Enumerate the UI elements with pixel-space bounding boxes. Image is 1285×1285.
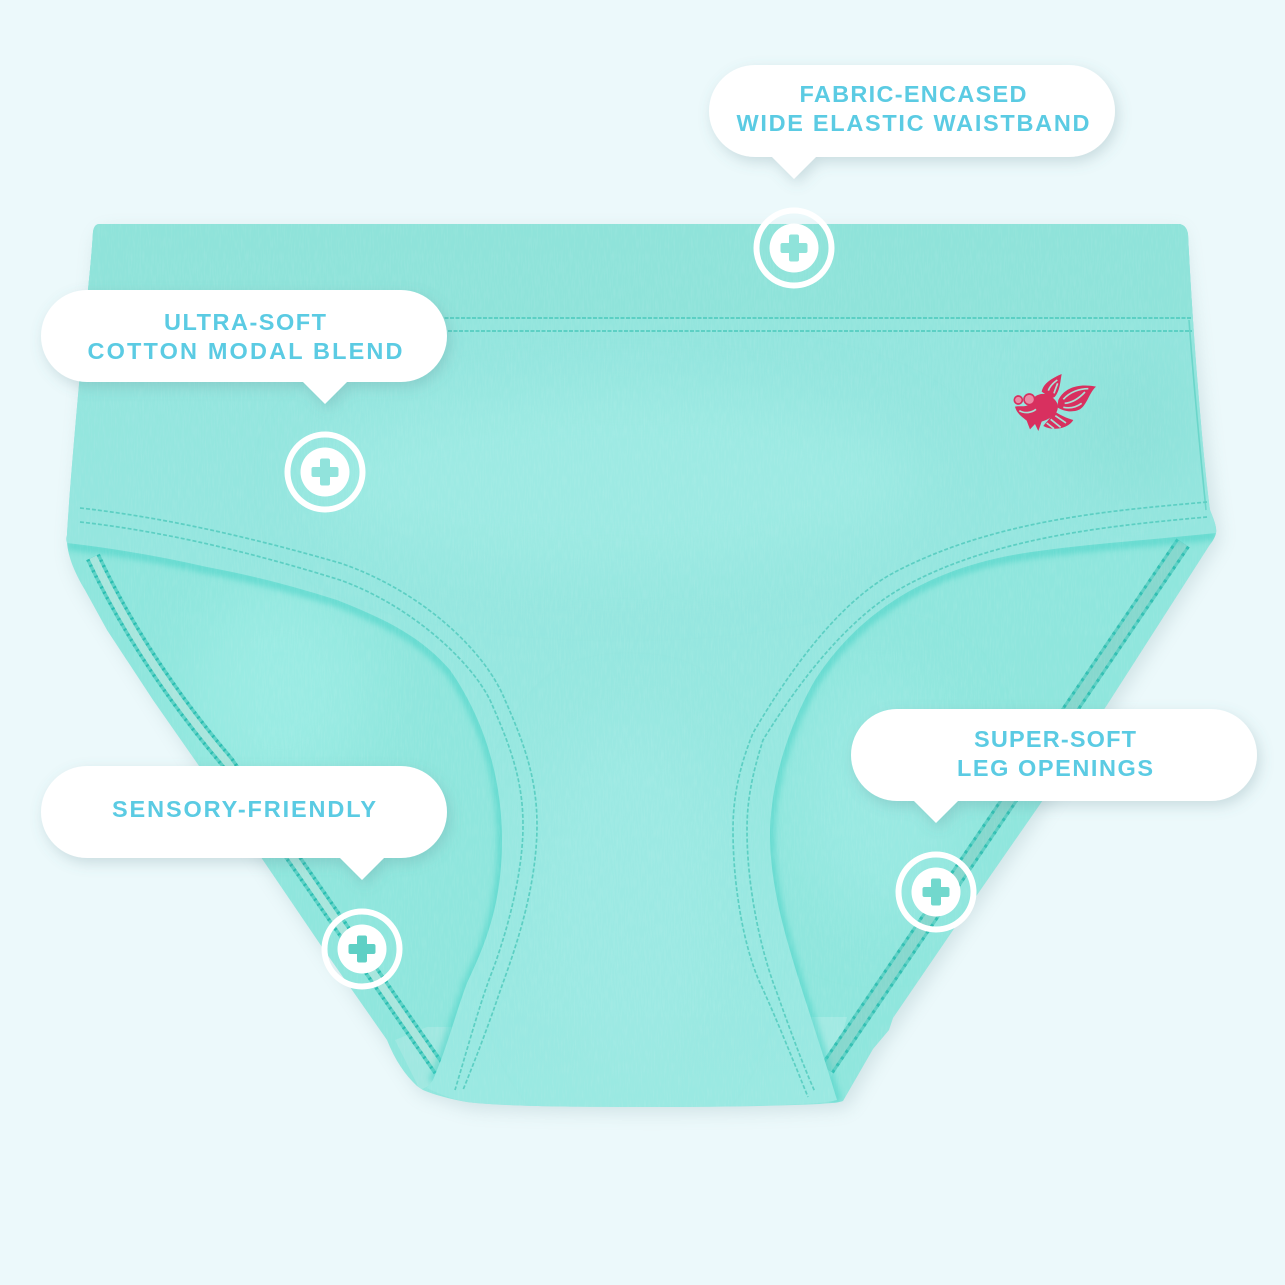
waistband [60, 224, 1220, 319]
callout: super-soft leg openings: LEG OPENINGS [957, 755, 1153, 781]
right leg hem stitching [733, 502, 1207, 1097]
callout: fabric-encased waistband: FABRIC-ENCASED [800, 81, 1026, 107]
fish lower fin [1043, 412, 1073, 429]
hotspot: leg openings [898, 854, 974, 930]
fish tail stripes [1063, 389, 1088, 408]
left leg hem stitching [80, 508, 537, 1090]
callout: sensory-friendly: SENSORY-FRIENDLY [112, 796, 376, 822]
hotspot: sensory-friendly [324, 912, 400, 986]
callout: ultra-soft blend [41, 290, 447, 404]
callout: ultra-soft blend: COTTON MODAL BLEND [88, 338, 402, 364]
right overlock seam [827, 543, 1183, 1069]
callout: fabric-encased waistband [709, 65, 1115, 179]
left overlock seam [93, 557, 440, 1070]
fish dorsal fin [1042, 374, 1062, 398]
icon: pink goldfish logo [1014, 374, 1096, 431]
right side seam edge [1189, 320, 1206, 510]
fish eye left [1014, 396, 1022, 404]
hotspot: fabric blend [288, 434, 362, 510]
callout: ultra-soft blend: ULTRA-SOFT [164, 309, 327, 335]
callout: fabric-encased waistband: WIDE ELASTIC WAISTBAND [736, 110, 1090, 136]
right cuff panel [811, 1017, 847, 1078]
garment soft shadow [71, 231, 1220, 1113]
waistband stitching [85, 318, 1192, 331]
hotspot: waistband [756, 210, 832, 286]
fabric knit texture [78, 242, 1185, 1072]
hem shadow [67, 535, 1216, 1102]
fish eye right [1024, 394, 1035, 405]
fish tail [1057, 385, 1096, 411]
left cuff panel [395, 1027, 457, 1090]
fish lower fin stripes [1047, 416, 1066, 429]
callout: super-soft leg openings: SUPER-SOFT [974, 726, 1137, 752]
callout: super-soft leg openings [851, 709, 1257, 823]
front panel [50, 200, 1240, 1130]
fish body [1015, 394, 1058, 431]
fish mouth [1019, 409, 1036, 413]
callout: sensory-friendly [41, 766, 447, 880]
back panel and leg openings [50, 200, 1240, 1130]
garment: teal briefs [50, 200, 1240, 1130]
fish dorsal stripes [1048, 380, 1058, 393]
